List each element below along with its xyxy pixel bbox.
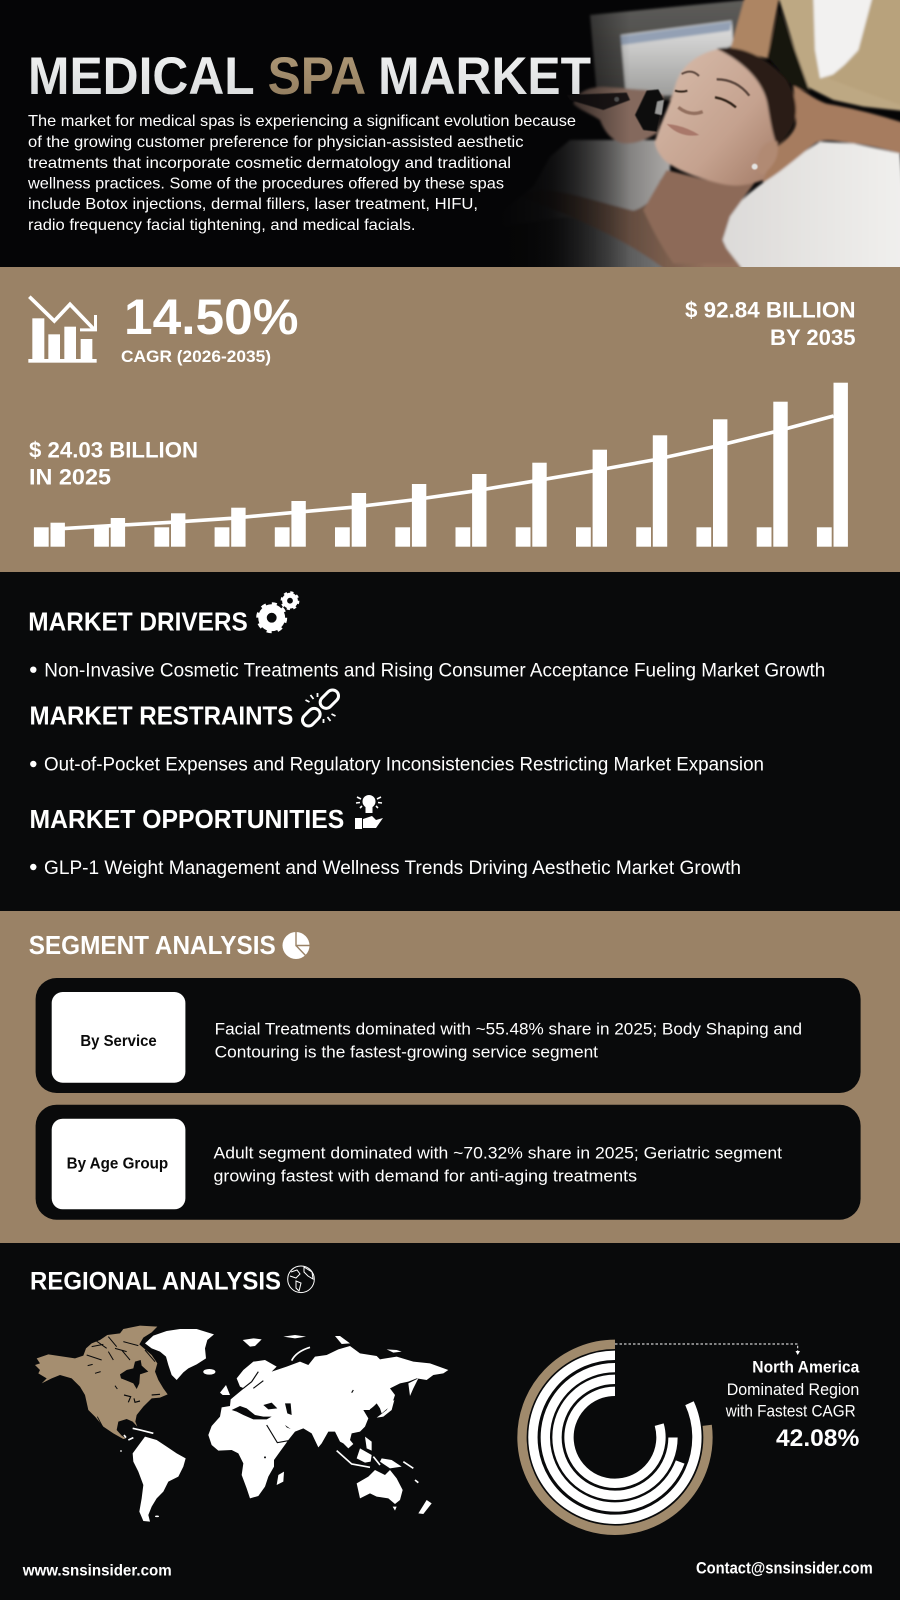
label box: by age group bbox=[52, 1119, 185, 1209]
footer: contact: Contact@snsinsider.com bbox=[696, 1558, 873, 1577]
panel: regional analysis bbox=[0, 1243, 900, 1600]
icon: gears bbox=[258, 592, 298, 632]
bar chart with growth line bbox=[34, 383, 848, 547]
callout: north america bbox=[725, 1358, 860, 1452]
panel: header bbox=[0, 0, 900, 277]
heading: market opportunities: MARKET OPPORTUNITIES bbox=[30, 806, 344, 834]
card: by age group bbox=[36, 1105, 861, 1220]
2025 value bbox=[29, 438, 198, 490]
intro paragraph: include Botox injections, dermal fillers, laser treatment, HIFU, bbox=[28, 196, 478, 213]
2035 value: BY 2035 bbox=[770, 325, 856, 350]
radial chart bbox=[522, 1344, 708, 1530]
map: eurasia africa australia bbox=[203, 1335, 448, 1514]
panel: segment analysis bbox=[0, 911, 900, 1243]
opportunity item: GLP-1 Weight Management and Wellness Trends Driving Aesthetic Market Growth bbox=[44, 858, 741, 879]
title: MEDICAL SPA MARKET bbox=[28, 47, 591, 106]
callout: north america: Dominated Region bbox=[727, 1380, 859, 1399]
callout: north america: 42.08% bbox=[776, 1425, 859, 1452]
footer: website: www.snsinsider.com bbox=[22, 1562, 172, 1579]
map: greenland and south america bbox=[120, 1329, 215, 1522]
icon: broken chain bbox=[300, 687, 341, 729]
callout: north america: North America bbox=[752, 1358, 860, 1377]
icon: globe bbox=[288, 1266, 314, 1293]
card: by service bbox=[36, 978, 861, 1093]
icon: pie chart bbox=[282, 931, 310, 959]
map: north america highlighted bbox=[35, 1326, 168, 1440]
text: by age group bbox=[214, 1144, 782, 1186]
label box: by age group: By Age Group bbox=[67, 1155, 168, 1172]
text: by service: Facial Treatments dominated with ~55.48% share in 2025; Body Shaping and bbox=[215, 1019, 802, 1038]
intro paragraph bbox=[27, 113, 576, 234]
driver item: Non-Invasive Cosmetic Treatments and Rising Consumer Acceptance Fueling Market Growth bbox=[44, 661, 825, 682]
2025 value: IN 2025 bbox=[29, 465, 111, 490]
intro paragraph: radio frequency facial tightening, and medical facials. bbox=[28, 217, 416, 234]
callout: north america: with Fastest CAGR bbox=[725, 1402, 856, 1421]
icon: chart with arrow bbox=[28, 297, 97, 363]
photo: spa treatment bbox=[546, 0, 900, 267]
2035 value bbox=[685, 298, 856, 350]
icon: lightbulb in hand bbox=[355, 795, 383, 829]
intro paragraph: The market for medical spas is experiencing a significant evolution because bbox=[28, 113, 576, 130]
label box: by service bbox=[52, 992, 185, 1083]
intro paragraph: wellness practices. Some of the procedures offered by these spas bbox=[27, 176, 504, 192]
photo left fade bbox=[500, 0, 630, 267]
panel: market size bbox=[0, 267, 900, 572]
text: by service: Contouring is the fastest-growing service segment bbox=[215, 1042, 598, 1061]
intro paragraph: treatments that incorporate cosmetic dermatology and traditional bbox=[28, 155, 511, 172]
panel: drivers restraints opportunities bbox=[0, 572, 900, 911]
heading: regional analysis: REGIONAL ANALYSIS bbox=[30, 1267, 281, 1295]
intro paragraph: of the growing customer preference for physician-assisted aesthetic bbox=[28, 134, 524, 151]
2035 value: $ 92.84 BILLION bbox=[685, 298, 856, 323]
CAGR label: CAGR (2026-2035) bbox=[121, 348, 271, 366]
heading: market restraints: MARKET RESTRAINTS bbox=[30, 703, 293, 731]
label box: by service: By Service bbox=[80, 1033, 157, 1050]
world map bbox=[35, 1326, 448, 1522]
2025 value: $ 24.03 BILLION bbox=[29, 438, 198, 463]
dashed connector arrow bbox=[615, 1344, 800, 1355]
text: by age group: Adult segment dominated with ~70.32% share in 2025; Geriatric segment bbox=[214, 1144, 782, 1163]
restraint item: Out-of-Pocket Expenses and Regulatory Inconsistencies Restricting Market Expansion bbox=[44, 755, 764, 776]
CAGR value: 14.50% bbox=[124, 289, 298, 345]
text: by service bbox=[215, 1019, 802, 1061]
heading: market drivers: MARKET DRIVERS bbox=[28, 609, 248, 637]
text: by age group: growing fastest with demand for anti-aging treatments bbox=[214, 1167, 637, 1186]
heading: segment analysis: SEGMENT ANALYSIS bbox=[29, 932, 276, 960]
